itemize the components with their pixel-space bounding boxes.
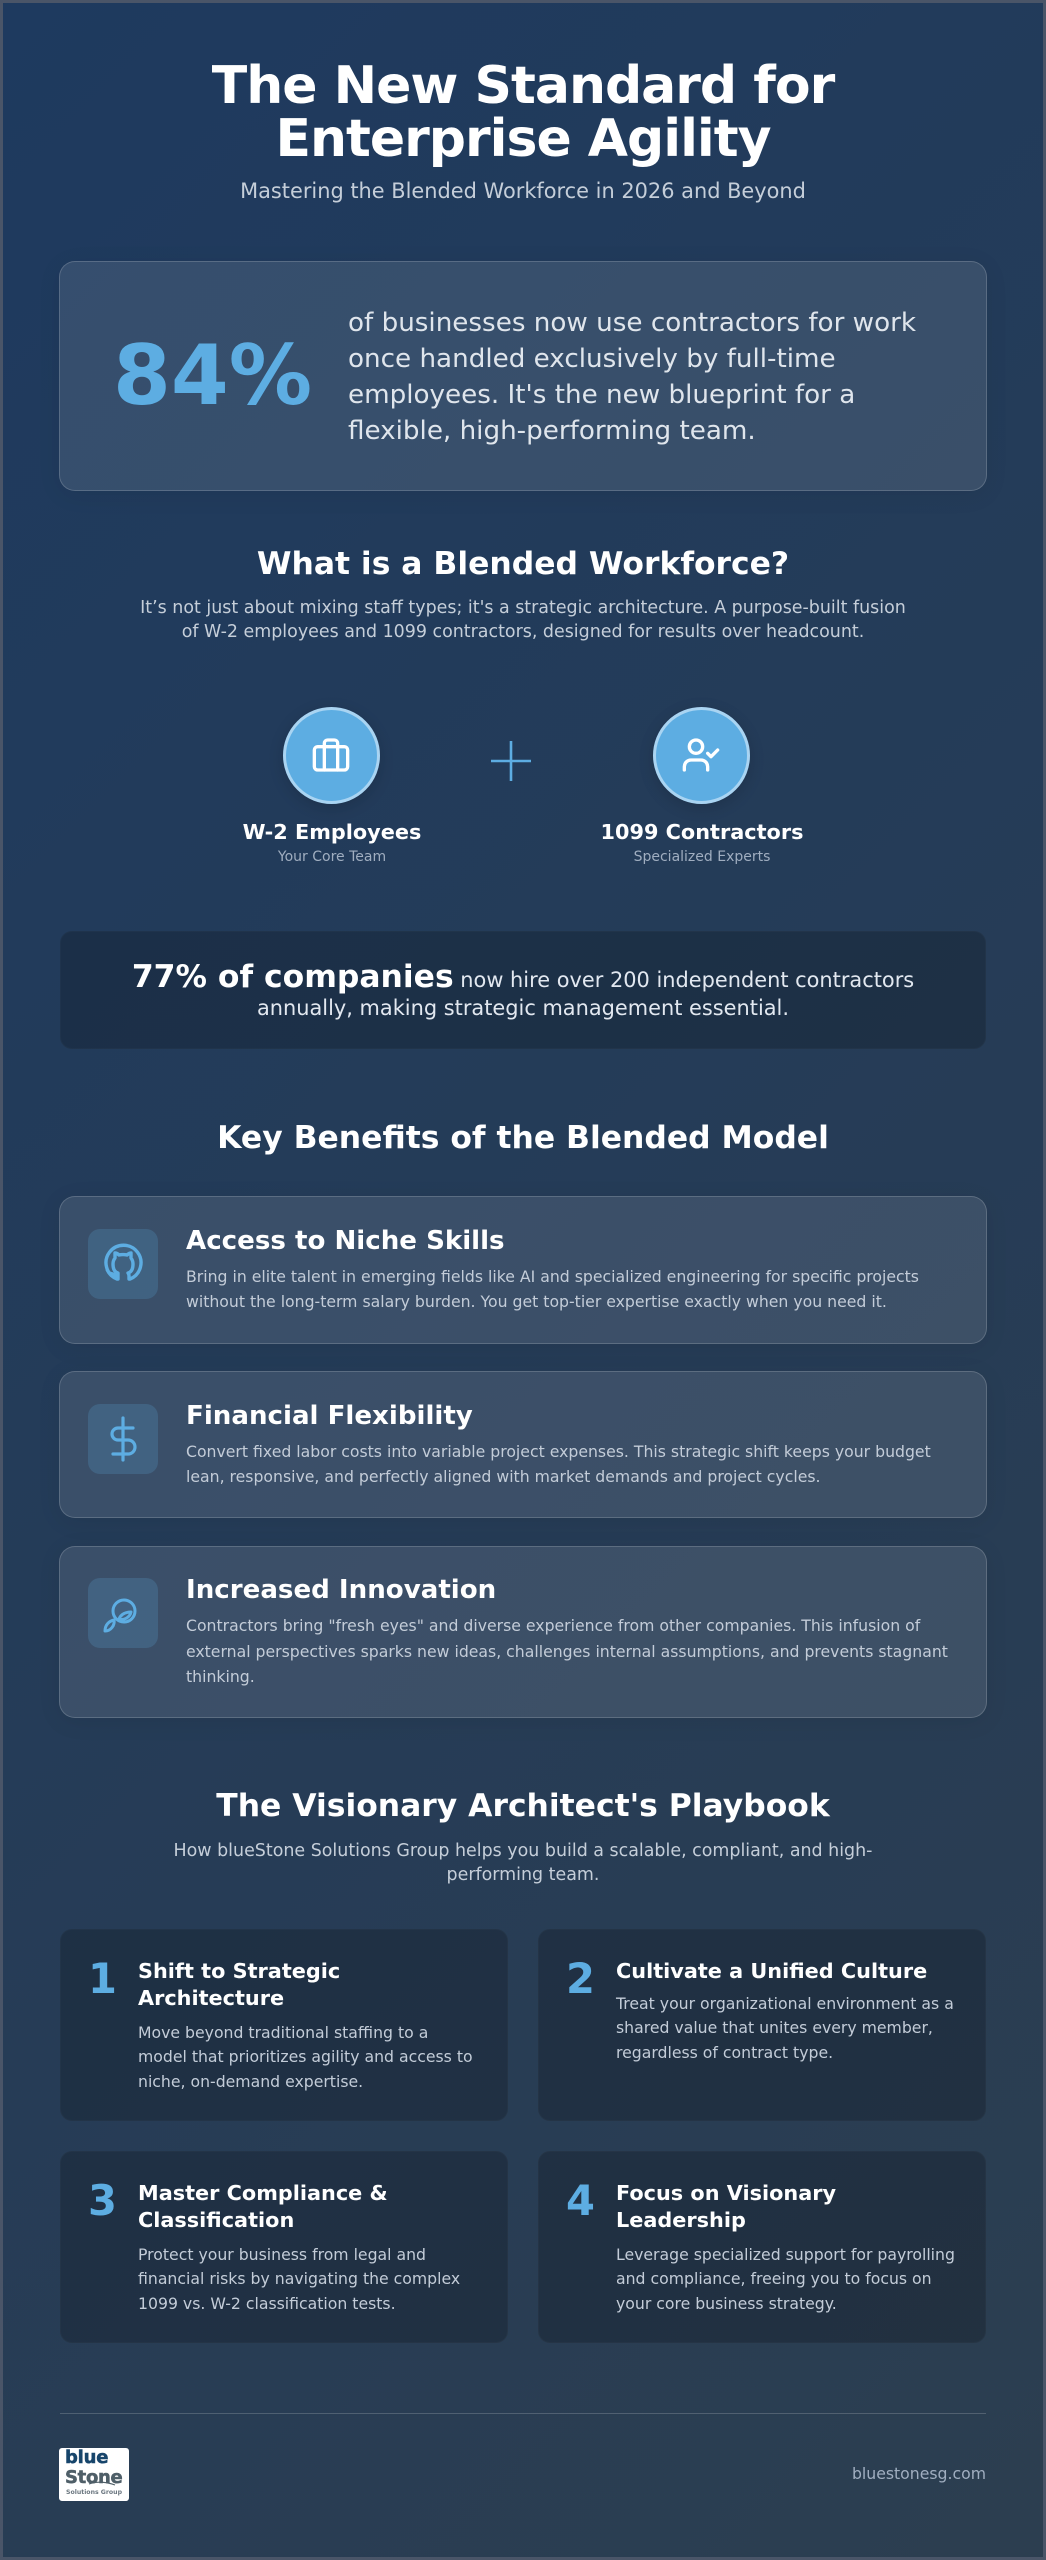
intro text: of W-2 employees and 1099 contractors, designed for results over headcount. bbox=[182, 622, 864, 642]
playbook intro: How blueStone Solutions Group helps you build a scalable, compliant, and high- bbox=[174, 1841, 872, 1861]
callout line 2: annually, making strategic management essential. bbox=[257, 996, 789, 1020]
label: 1099 contractors: 1099 Contractors bbox=[601, 820, 803, 844]
icon: user check circle bbox=[653, 707, 750, 804]
website: bluestonesg.com bbox=[852, 2464, 986, 2483]
logo: Solutions Group bbox=[66, 2489, 122, 2496]
step 4 title: Focus on Visionary bbox=[616, 2180, 836, 2204]
heading: what is a blended workforce: What is a Blended Workforce? bbox=[257, 546, 789, 582]
step 1 text bbox=[138, 2023, 473, 2091]
title: The New Standard for bbox=[212, 56, 834, 116]
step 2 text bbox=[616, 1994, 954, 2062]
sublabel: your core team: Your Core Team bbox=[278, 849, 386, 865]
panel: step 4 bbox=[538, 2151, 986, 2343]
sublabel: specialized experts: Specialized Experts bbox=[634, 849, 770, 865]
benefit 1 text: Bring in elite talent in emerging fields like AI and specialized engineering for specific projects bbox=[186, 1266, 919, 1286]
playbook intro bbox=[174, 1841, 872, 1885]
statistic description: flexible, high-performing team. bbox=[348, 416, 756, 446]
statistic description: of businesses now use contractors for work bbox=[348, 308, 916, 338]
step 3 title: Master Compliance & bbox=[138, 2180, 388, 2204]
benefit 3 text: thinking. bbox=[186, 1667, 255, 1686]
heading: playbook: The Visionary Architect's Playbook bbox=[216, 1788, 830, 1824]
icon: dollar bbox=[88, 1404, 158, 1474]
step 4 number: 4 bbox=[566, 2176, 595, 2225]
benefit 2 text: Convert fixed labor costs into variable project expenses. This strategic shift keeps your budget bbox=[186, 1442, 931, 1460]
logo bbox=[59, 2448, 129, 2501]
intro text: It’s not just about mixing staff types; it's a strategic architecture. A purpose-built fusion bbox=[140, 598, 906, 618]
step 3 text: 1099 vs. W-2 classification tests. bbox=[138, 2294, 396, 2313]
step 1 title bbox=[138, 1958, 340, 2010]
statistic description: once handled exclusively by full-time bbox=[348, 344, 836, 374]
statistic description bbox=[348, 308, 916, 446]
panel: benefit 3 bbox=[59, 1546, 987, 1718]
icon: briefcase circle bbox=[283, 707, 380, 804]
step 3 title bbox=[138, 2180, 388, 2232]
benefit 1 title: Access to Niche Skills bbox=[186, 1226, 505, 1256]
callout line 1: 77% of companies now hire over 200 independent contractors bbox=[132, 959, 914, 995]
icon: rings bbox=[88, 1578, 158, 1648]
step 4 text: your core business strategy. bbox=[616, 2294, 837, 2313]
benefit 2 text: lean, responsive, and perfectly aligned with market demands and project cycles. bbox=[186, 1467, 821, 1486]
step 4 title bbox=[616, 2180, 836, 2232]
benefit 1 text: without the long-term salary burden. You get top-tier expertise exactly when you need it. bbox=[186, 1292, 887, 1311]
step 1 text: niche, on-demand expertise. bbox=[138, 2072, 363, 2091]
step 4 text: and compliance, freeing you to focus on bbox=[616, 2269, 932, 2288]
intro text bbox=[140, 598, 906, 642]
benefit 1 text bbox=[186, 1266, 919, 1311]
benefit 2 title: Financial Flexibility bbox=[186, 1401, 473, 1431]
step 2 text: regardless of contract type. bbox=[616, 2043, 833, 2062]
panel: 84% statistic bbox=[59, 261, 987, 491]
step 3 title: Classification bbox=[138, 2208, 294, 2232]
subtitle: Mastering the Blended Workforce in 2026 and Beyond bbox=[240, 179, 806, 203]
icon: plus bbox=[491, 741, 531, 781]
benefit 3 text bbox=[186, 1616, 948, 1686]
step 2 text: shared value that unites every member, bbox=[616, 2018, 933, 2037]
statistic number: 84% bbox=[113, 327, 312, 424]
step 4 text: Leverage specialized support for payrolling bbox=[616, 2245, 955, 2264]
step 1 title: Shift to Strategic bbox=[138, 1958, 340, 1982]
callout: 77% of companies bbox=[60, 931, 986, 1049]
playbook intro: performing team. bbox=[447, 1865, 599, 1885]
step 1 text: Move beyond traditional staffing to a bbox=[138, 2023, 428, 2042]
step 1 number: 1 bbox=[88, 1954, 117, 2003]
title bbox=[212, 56, 836, 168]
panel: step 1 bbox=[60, 1929, 508, 2121]
step 3 text: Protect your business from legal and bbox=[138, 2245, 426, 2264]
step 2 text: Treat your organizational environment as a bbox=[616, 1994, 954, 2013]
step 4 title: Leadership bbox=[616, 2208, 746, 2232]
step 2 number: 2 bbox=[566, 1954, 595, 2003]
panel: benefit 2 bbox=[59, 1371, 987, 1518]
step 3 text: financial risks by navigating the complex bbox=[138, 2269, 460, 2288]
step 4 text bbox=[616, 2245, 955, 2313]
benefit 3 title: Increased Innovation bbox=[186, 1575, 496, 1605]
benefit 3 text: Contractors bring "fresh eyes" and diverse experience from other companies. This infusion of bbox=[186, 1616, 920, 1635]
panel: step 3 bbox=[60, 2151, 508, 2343]
panel: step 2 bbox=[538, 1929, 986, 2121]
icon: github bbox=[88, 1229, 158, 1299]
step 1 text: model that prioritizes agility and access to bbox=[138, 2047, 473, 2066]
title: Enterprise Agility bbox=[275, 108, 771, 168]
heading: key benefits: Key Benefits of the Blended Model bbox=[217, 1120, 829, 1156]
logo: Stone bbox=[65, 2467, 122, 2488]
panel: benefit 1 bbox=[59, 1196, 987, 1344]
step 3 text bbox=[138, 2245, 460, 2313]
statistic description: employees. It's the new blueprint for a bbox=[348, 380, 855, 410]
step 3 number: 3 bbox=[88, 2176, 117, 2225]
benefit 3 text: external perspectives sparks new ideas, challenges internal assumptions, and prevents stagnant bbox=[186, 1642, 948, 1660]
step 2 title: Cultivate a Unified Culture bbox=[616, 1958, 927, 1982]
label: W-2 employees: W-2 Employees bbox=[243, 820, 421, 844]
step 1 title: Architecture bbox=[138, 1986, 284, 2010]
benefit 2 text bbox=[186, 1442, 931, 1486]
